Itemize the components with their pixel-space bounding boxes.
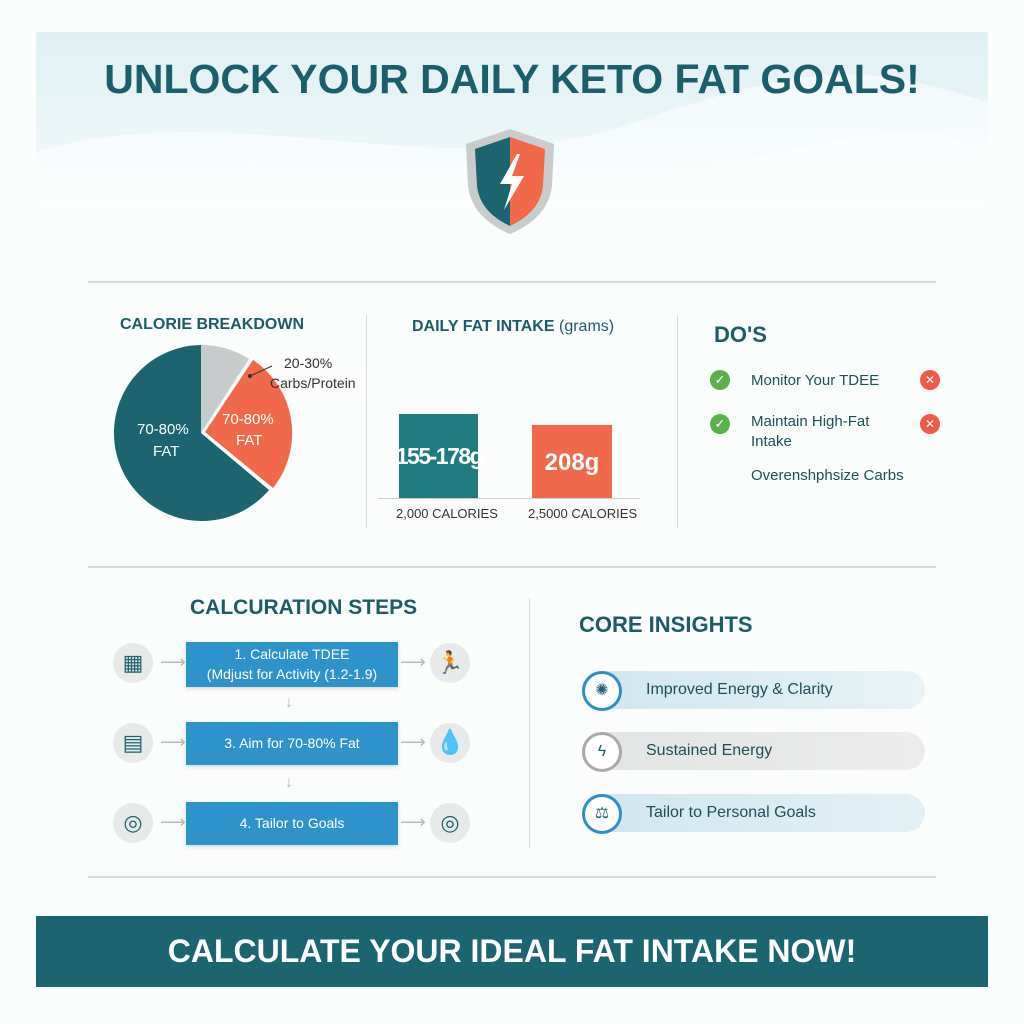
insight: sustained energy: ϟ: [598, 743, 606, 760]
insight: improved energy: Improved Energy & Clarity: [646, 681, 833, 698]
panel: calorie breakdown: [114, 316, 356, 521]
insight: sustained energy: [582, 732, 925, 770]
icons and arrows: ⟶: [160, 732, 186, 752]
panel: do's: [710, 322, 940, 484]
item: maintain high fat: [710, 413, 940, 450]
panel: daily fat intake bar chart: 2,5000 CALORIES: [528, 506, 637, 521]
icons and arrows: ⟶: [160, 652, 186, 672]
header banner: [36, 32, 988, 212]
item: monitor tdee: ✕: [925, 373, 935, 387]
footer call to action: CALCULATE YOUR IDEAL FAT INTAKE NOW!: [168, 933, 856, 969]
heading: DAILY FAT INTAKE (grams): [412, 318, 614, 335]
icons and arrows: ▤: [123, 730, 143, 755]
item: maintain high fat: ✕: [925, 417, 935, 431]
insight: tailor to goals: [582, 794, 925, 832]
insight: tailor to goals: ⚖: [595, 805, 609, 822]
pie chart: 20-30%: [284, 355, 332, 371]
item: maintain high fat: Maintain High-Fat: [751, 413, 869, 430]
icons and arrows: ↓: [285, 694, 293, 711]
panel: daily fat intake bar chart: 155-178g: [396, 443, 482, 469]
pie chart: FAT: [153, 443, 179, 460]
icons and arrows: ⟶: [400, 812, 426, 832]
icons and arrows: ↓: [285, 774, 293, 791]
insight: tailor to goals: Tailor to Personal Goals: [646, 804, 816, 821]
icons and arrows: 🏃: [436, 650, 464, 675]
panel: daily fat intake bar chart: 2,000 CALORIES: [396, 506, 498, 521]
step 4: [186, 802, 398, 845]
title: UNLOCK YOUR DAILY KETO FAT GOALS!: [104, 56, 920, 102]
step 4: 4. Tailor to Goals: [240, 815, 344, 831]
icons and arrows: ◎: [123, 810, 143, 835]
step 1: (Mdjust for Activity (1.2-1.9): [207, 666, 377, 682]
step 3: 3. Aim for 70-80% Fat: [224, 735, 360, 751]
item: monitor tdee: Monitor Your TDEE: [751, 372, 879, 389]
icons and arrows: ⟶: [400, 652, 426, 672]
step 1: 1. Calculate TDEE: [235, 646, 349, 662]
insight: improved energy: ✺: [595, 682, 609, 699]
step 3: [186, 722, 398, 765]
item: maintain high fat: Intake: [751, 433, 792, 450]
pie chart: 70-80%: [137, 421, 189, 438]
icons and arrows: [113, 643, 470, 843]
heading: CORE INSIGHTS: [579, 612, 753, 637]
bar: 2500 calories: 208g: [545, 449, 599, 476]
heading: CALCURATION STEPS: [190, 596, 417, 619]
icon: shield with lightning: [466, 129, 554, 234]
step 1: [186, 642, 398, 687]
item: maintain high fat: ✓: [715, 416, 725, 431]
icons and arrows: ⟶: [160, 812, 186, 832]
pie chart: [114, 345, 356, 521]
pie chart: Carbs/Protein: [270, 375, 356, 391]
item: monitor tdee: [710, 370, 940, 390]
insight: improved energy: [582, 671, 925, 709]
icons and arrows: ▦: [123, 650, 143, 675]
footer call to action: [36, 916, 988, 987]
panel: daily fat intake bar chart: [378, 318, 640, 521]
pie chart: 70-80%: [222, 411, 274, 428]
item: overemphasize carbs: Overenshphsize Carbs: [751, 467, 904, 484]
heading: DO'S: [714, 322, 767, 347]
bar: 2500 calories: [532, 425, 612, 498]
heading: CALORIE BREAKDOWN: [120, 316, 304, 333]
icons and arrows: ◎: [440, 810, 460, 835]
insight: sustained energy: Sustained Energy: [646, 742, 772, 759]
item: monitor tdee: ✓: [715, 372, 725, 387]
icons and arrows: 💧: [435, 729, 465, 756]
pie chart: FAT: [236, 432, 262, 449]
bar: 2000 calories: [399, 414, 478, 498]
icons and arrows: ⟶: [400, 732, 426, 752]
